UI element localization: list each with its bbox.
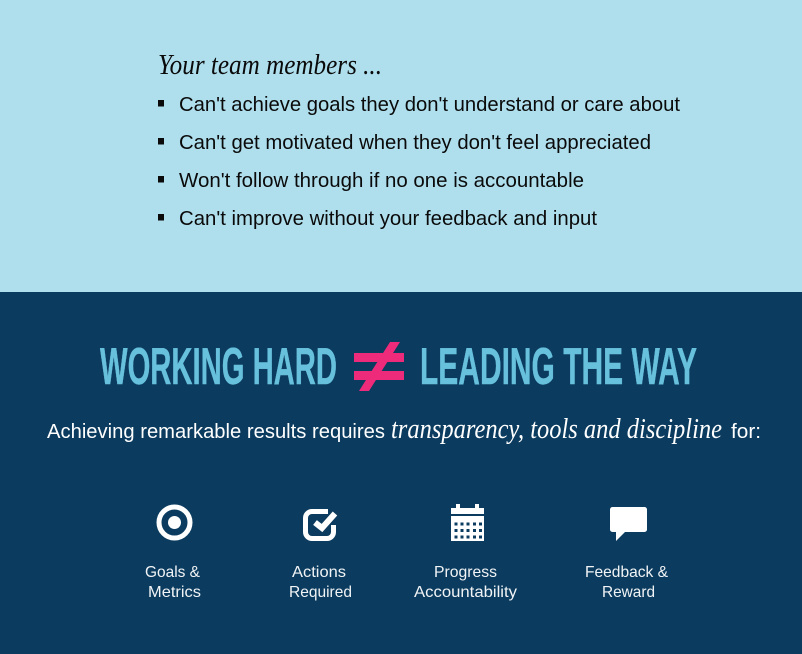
label: goals and metrics: Goals & <box>145 564 200 581</box>
icon: target <box>159 507 190 538</box>
subheading: transparency, tools and discipline <box>391 414 722 445</box>
bullet list <box>158 93 680 230</box>
item: actions required <box>289 512 352 601</box>
bullet list: Won't follow through if no one is accountable <box>179 169 584 192</box>
label: goals and metrics: Metrics <box>148 584 201 601</box>
item: feedback and reward <box>585 507 668 601</box>
panel: working hard vs leading <box>0 292 802 654</box>
label: feedback and reward: Feedback & <box>585 564 668 581</box>
icon: calendar <box>451 504 484 541</box>
icon: checkbox <box>306 512 335 538</box>
label: goals and metrics <box>145 564 201 601</box>
label: actions required <box>289 564 352 601</box>
label: actions required: Required <box>289 584 352 601</box>
subheading <box>47 414 761 445</box>
label: progress accountability: Accountability <box>414 584 517 601</box>
subheading: Achieving remarkable results requires <box>47 420 385 443</box>
item: goals and metrics <box>145 507 201 601</box>
bullet list: Can't improve without your feedback and input <box>179 207 597 230</box>
item: progress accountability <box>414 504 517 601</box>
headline left: WORKING HARD <box>100 338 337 396</box>
subheading: for: <box>731 420 761 443</box>
label: actions required: Actions <box>292 564 346 581</box>
heading: your team members: Your team members ... <box>158 49 382 81</box>
label: progress accountability: Progress <box>434 564 497 581</box>
label: feedback and reward: Reward <box>602 584 655 601</box>
bullet list: Can't achieve goals they don't understand or care about <box>179 93 680 116</box>
icon: speech bubble <box>610 507 647 541</box>
label: progress accountability <box>414 564 517 601</box>
icon: not equal sign <box>354 342 404 391</box>
panel: team members <box>0 0 802 292</box>
label: feedback and reward <box>585 564 668 601</box>
bullet list: Can't get motivated when they don't feel appreciated <box>179 131 651 154</box>
